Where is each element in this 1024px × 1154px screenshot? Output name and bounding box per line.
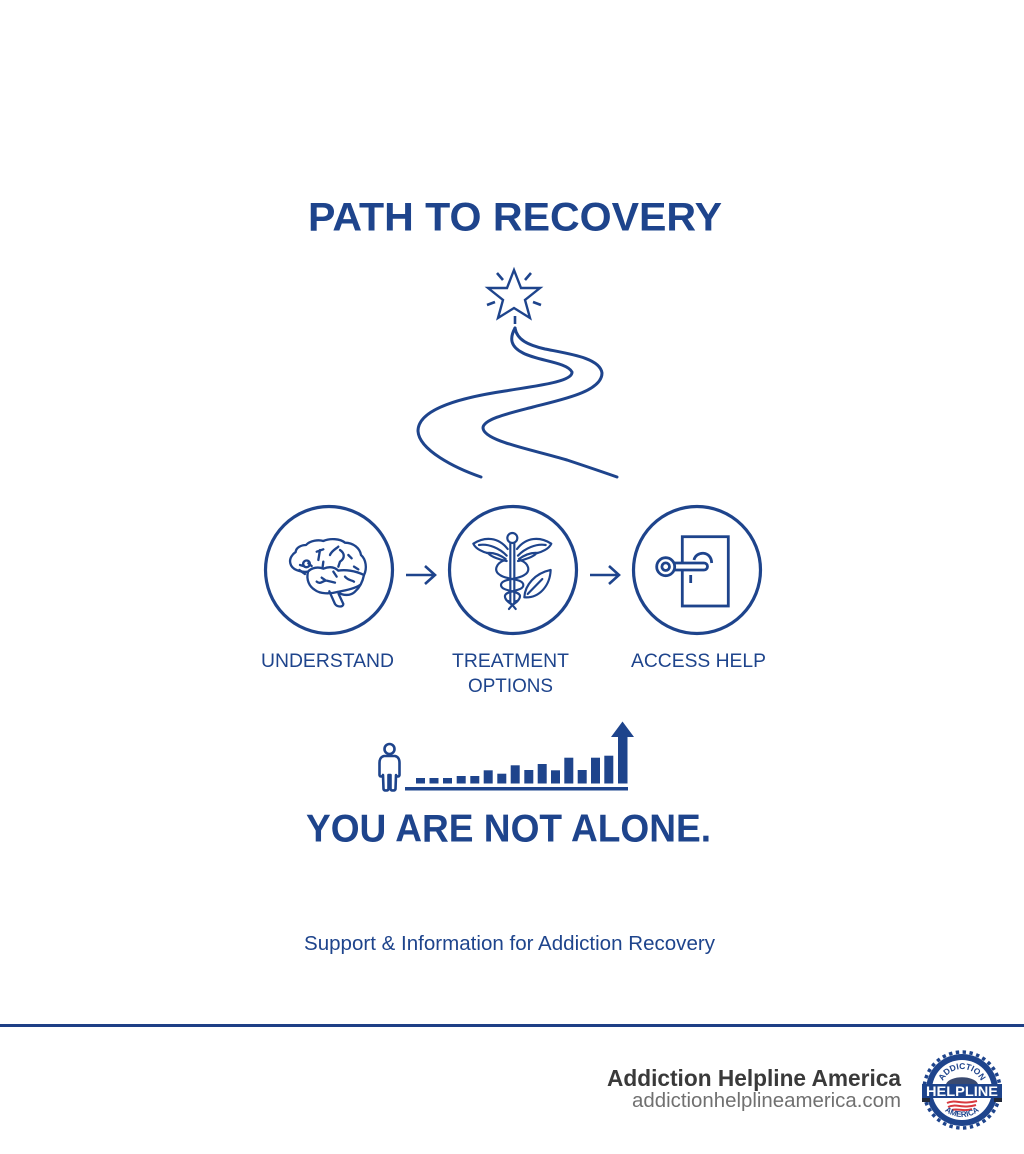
logo badge: AMERICA (944, 1108, 979, 1118)
logo badge: ADDICTION (939, 1063, 986, 1081)
footer brand name: Addiction Helpline America (607, 1065, 901, 1091)
step: treatment (450, 506, 576, 634)
winding road (418, 328, 617, 477)
step: access help (634, 506, 760, 634)
icon: star with rays (487, 270, 541, 324)
label: treatment options: OPTIONS (468, 676, 553, 697)
icon: caduceus and leaf (473, 533, 551, 609)
icon circle: door key (634, 506, 760, 634)
arrow: understand to treatment (406, 566, 435, 584)
title: PATH TO RECOVERY (308, 196, 722, 240)
subtitle: Support & Information for Addiction Recovery (304, 933, 715, 955)
label: access help: ACCESS HELP (631, 651, 766, 672)
icon circle: brain (266, 506, 392, 634)
icon: door and key (657, 537, 728, 606)
logo badge: HELPLINE (926, 1083, 998, 1099)
icon: person (380, 744, 400, 790)
label: treatment options (452, 651, 569, 697)
arrow: treatment to access (590, 566, 619, 584)
label: treatment options: TREATMENT (452, 651, 569, 672)
bar chart: rising progress (405, 722, 634, 790)
footer divider (0, 1024, 1024, 1027)
footer url: addictionhelplineamerica.com (632, 1090, 901, 1112)
step: understand (266, 506, 392, 634)
icon: brain (290, 539, 366, 606)
heading: you are not alone: YOU ARE NOT ALONE. (306, 808, 711, 850)
logo badge (922, 1050, 1002, 1130)
icon circle: caduceus (450, 506, 576, 634)
label: understand: UNDERSTAND (261, 651, 394, 672)
